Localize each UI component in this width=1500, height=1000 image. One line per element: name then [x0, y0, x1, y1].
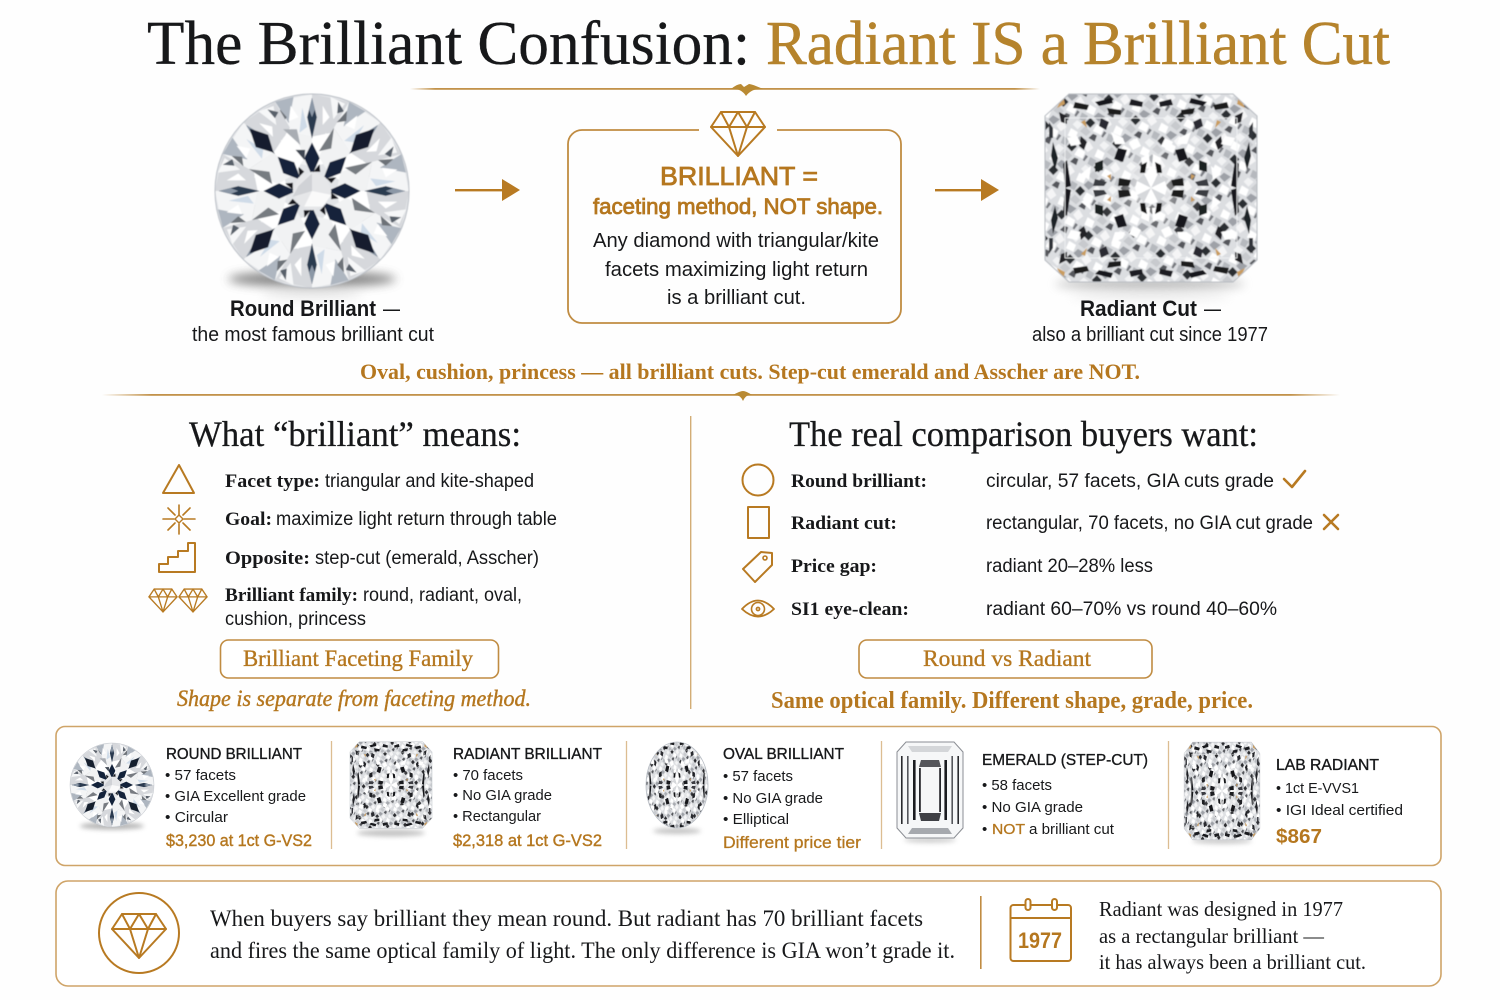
definition text: facets maximizing light return: [605, 259, 868, 281]
emerald image: [897, 742, 963, 843]
panel: cut comparison strip: [56, 726, 1441, 866]
round brilliant caption: [192, 296, 434, 346]
icon: price tag: [743, 552, 772, 582]
brilliant family text: round, radiant, oval,: [363, 585, 522, 606]
lab radiant specs: [1276, 757, 1403, 848]
price gap row: Price gap:: [791, 556, 877, 577]
radiant cut row: [791, 513, 1313, 534]
tagline: Shape is separate from faceting method.: [177, 686, 531, 711]
icon: calendar 1977: 1977: [1018, 928, 1062, 953]
opposite text: [225, 548, 539, 569]
definition text: [593, 230, 879, 309]
round brilliant row: circular, 57 facets, GIA cuts grade: [986, 471, 1274, 492]
icon: eye: [742, 600, 774, 616]
takeaway text: [210, 906, 955, 963]
radiant cut row: rectangular, 70 facets, no GIA cut grade: [986, 513, 1313, 534]
definition text: Any diamond with triangular/kite: [593, 230, 879, 252]
heading: The real comparison buyers want:: [789, 414, 1258, 454]
icon: diamond: [711, 112, 765, 156]
radiant caption: [1032, 296, 1268, 346]
oval specs: OVAL BRILLIANT: [723, 746, 844, 763]
radiant caption: —: [1204, 296, 1221, 321]
card: radiant brilliant: [350, 742, 602, 850]
icon: two diamonds: [149, 589, 207, 612]
panel: bottom takeaway: [56, 881, 1441, 986]
button: brilliant faceting family: [220, 640, 498, 678]
price gap row: [791, 556, 1153, 577]
eye-clean row: [791, 599, 1277, 620]
radiant diamond: [1045, 94, 1257, 282]
icon: circle: [742, 464, 774, 496]
icon: check: [1284, 471, 1305, 487]
emerald specs: a brilliant cut: [1029, 821, 1115, 838]
round specs: $3,230 at 1ct G-VS2: [166, 831, 312, 850]
round specs: • Circular: [165, 809, 228, 826]
opposite text: step-cut (emerald, Asscher): [315, 548, 539, 569]
opposite text: Opposite:: [225, 548, 310, 569]
round specs: • 57 facets: [165, 767, 236, 784]
radiant caption: also a brilliant cut since 1977: [1032, 324, 1268, 346]
definition heading: [593, 161, 883, 219]
icon: triangle: [163, 465, 194, 493]
oval image: [643, 739, 711, 834]
oval specs: Different price tier: [723, 833, 861, 852]
radiant specs: • 70 facets: [453, 767, 523, 784]
definition heading: BRILLIANT =: [660, 161, 818, 191]
emerald specs: • 58 facets: [982, 777, 1052, 794]
round brilliant caption: Round Brilliant: [230, 296, 377, 321]
round brilliant caption: —: [383, 296, 400, 321]
brilliant family text: [225, 585, 522, 630]
heading: What “brilliant” means:: [189, 414, 521, 454]
title: [147, 10, 1390, 78]
tagline: Same optical family. Different shape, grade, price.: [771, 688, 1253, 714]
panel: radiant cut: [1032, 94, 1268, 346]
lab radiant specs: $867: [1276, 826, 1322, 848]
radiant caption: Radiant Cut: [1080, 296, 1198, 321]
goal text: Goal:: [225, 509, 272, 530]
eye-clean row: SI1 eye-clean:: [791, 599, 909, 620]
title: The Brilliant Confusion:: [147, 10, 750, 78]
radiant specs: [453, 746, 602, 850]
oval specs: • 57 facets: [723, 768, 793, 785]
button: round vs radiant: Round vs Radiant: [923, 646, 1092, 671]
takeaway text: and fires the same optical family of light. The only difference is GIA won’t grade it.: [210, 938, 955, 963]
round specs: [165, 746, 312, 850]
radiant specs: RADIANT BRILLIANT: [453, 746, 602, 763]
oval specs: • No GIA grade: [723, 790, 823, 807]
goal text: maximize light return through table: [276, 509, 557, 530]
round brilliant diamond: [215, 94, 409, 288]
icon: diamond in circle: [99, 893, 179, 973]
oval specs: [723, 746, 861, 852]
icon: sparkle: [163, 505, 195, 534]
card: round brilliant: [70, 743, 312, 850]
icon: steps: [159, 543, 195, 572]
history text: [1099, 897, 1366, 974]
round image: [70, 743, 154, 830]
panel: real comparison: [742, 414, 1338, 714]
icon: rectangle: [748, 507, 769, 538]
round specs: ROUND BRILLIANT: [166, 746, 302, 763]
card: emerald step-cut: [897, 742, 1148, 843]
facet type text: Facet type:: [225, 471, 320, 492]
icon: calendar 1977: [1010, 899, 1071, 961]
history text: Radiant was designed in 1977: [1099, 897, 1343, 921]
lab radiant specs: • 1ct E-VVS1: [1276, 780, 1359, 797]
diamond shadow: [228, 271, 396, 299]
round brilliant row: [791, 471, 1274, 492]
arrow: definition to radiant: [935, 179, 999, 201]
lab radiant image: [1184, 742, 1260, 844]
radiant image: [350, 742, 432, 836]
emerald specs: NOT: [992, 821, 1025, 838]
panel: round brilliant: [192, 94, 434, 346]
panel: what brilliant means: [149, 414, 557, 711]
facet type text: triangular and kite-shaped: [325, 471, 534, 492]
radiant cut row: Radiant cut:: [791, 513, 897, 534]
emerald specs: [982, 752, 1148, 838]
radiant specs: • No GIA grade: [453, 787, 552, 804]
panel: brilliant definition: [568, 112, 901, 323]
radiant shadow: [1055, 279, 1245, 301]
history text: it has always been a brilliant cut.: [1099, 950, 1366, 974]
oval specs: • Elliptical: [723, 811, 789, 828]
takeaway text: When buyers say brilliant they mean round. But radiant has 70 brilliant facets: [210, 906, 923, 931]
lab radiant specs: LAB RADIANT: [1276, 757, 1379, 774]
title: Radiant IS a Brilliant Cut: [766, 10, 1390, 78]
emerald specs: EMERALD (STEP-CUT): [982, 752, 1148, 769]
eye-clean row: radiant 60–70% vs round 40–60%: [986, 599, 1277, 620]
definition text: is a brilliant cut.: [667, 287, 806, 309]
price gap row: radiant 20–28% less: [986, 556, 1153, 577]
definition heading: faceting method, NOT shape.: [593, 194, 883, 219]
round brilliant row: Round brilliant:: [791, 471, 927, 492]
brilliant cuts note: Oval, cushion, princess — all brilliant cuts. Step-cut emerald and Asscher are NOT.: [360, 359, 1140, 384]
icon: cross: [1324, 515, 1338, 529]
brilliant family text: Brilliant family:: [225, 585, 358, 606]
button: round vs radiant: [859, 640, 1152, 678]
radiant specs: $2,318 at 1ct G-VS2: [453, 831, 602, 850]
button: brilliant faceting family: Brilliant Faceting Family: [243, 646, 473, 671]
emerald specs: • No GIA grade: [982, 799, 1083, 816]
round specs: • GIA Excellent grade: [165, 788, 306, 805]
card: lab radiant: [1184, 742, 1403, 848]
arrow: round to definition: [455, 179, 520, 201]
facet type text: [225, 471, 534, 492]
round brilliant caption: the most famous brilliant cut: [192, 324, 434, 346]
brilliant family text: cushion, princess: [225, 609, 366, 630]
history text: as a rectangular brilliant —: [1099, 924, 1325, 948]
lab radiant specs: • IGI Ideal certified: [1276, 802, 1403, 819]
card: oval brilliant: [643, 739, 861, 852]
radiant specs: • Rectangular: [453, 808, 541, 825]
emerald specs: •: [982, 821, 987, 838]
